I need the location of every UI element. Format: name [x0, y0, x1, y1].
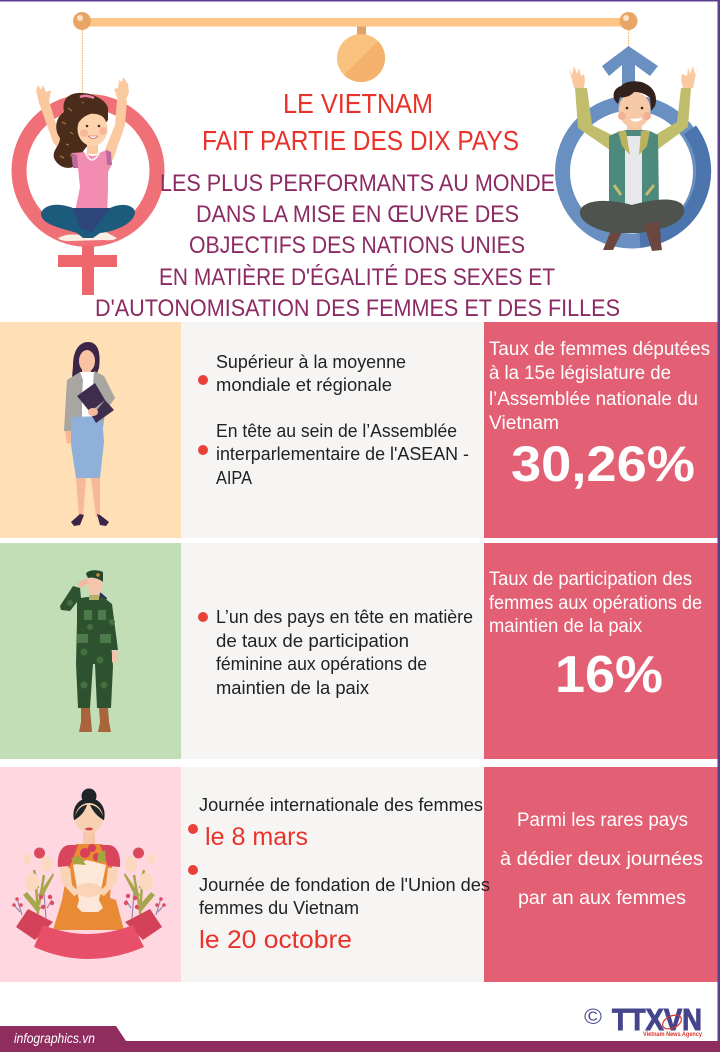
callout text: Parmi les rares pays	[517, 810, 688, 831]
icon: female soldier saluting	[60, 570, 118, 732]
title	[202, 88, 519, 156]
source label: infographics.vn	[14, 1030, 95, 1046]
bullet list	[198, 352, 469, 488]
bullet list: Supérieur à la moyenne	[216, 352, 406, 372]
icon: businesswoman	[64, 342, 115, 526]
icon: female symbol with seated woman	[19, 77, 157, 295]
stat: 16%: femmes aux opérations de	[489, 593, 702, 614]
subtitle: OBJECTIFS DES NATIONS UNIES	[189, 232, 525, 259]
bullet list: interparlementaire de l'ASEAN -	[216, 444, 469, 464]
stat: 30,26%	[489, 339, 710, 492]
panel: row 2 peacekeeping	[0, 543, 718, 759]
stat: 16%: 16%	[555, 646, 663, 704]
bullets and dates: le 20 octobre	[199, 926, 352, 954]
icon: woman with bouquet and ribbon	[12, 788, 166, 959]
panel: row 3 women's days	[0, 767, 718, 982]
bullets and dates: Journée de fondation de l'Union des	[199, 875, 490, 895]
bullets and dates: femmes du Vietnam	[199, 898, 359, 918]
bullet list: AIPA	[216, 468, 252, 488]
icon: balance scale beam	[73, 12, 638, 95]
callout text: à dédier deux journées	[500, 849, 703, 870]
stat: 30,26%: l’Assemblée nationale du	[489, 389, 698, 410]
bullets and dates: le 8 mars	[205, 823, 308, 851]
footer bar	[0, 1026, 720, 1052]
logo: TTXVN: Vietnam News Agency	[643, 1031, 702, 1038]
bullets and dates: Journée internationale des femmes	[199, 795, 483, 815]
bullet list: mondiale et régionale	[216, 375, 392, 395]
subtitle: DANS LA MISE EN ŒUVRE DES	[196, 201, 519, 228]
subtitle: EN MATIÈRE D'ÉGALITÉ DES SEXES ET	[159, 264, 555, 291]
bullet list: de taux de participation	[216, 631, 409, 651]
subtitle	[95, 170, 620, 322]
stat: 30,26%: Taux de femmes députées	[489, 339, 710, 360]
callout text	[500, 810, 703, 909]
bullet list: maintien de la paix	[216, 678, 369, 698]
logo: TTXVN	[584, 1002, 702, 1038]
title line 1: LE VIETNAM	[283, 88, 433, 119]
bullet list: féminine aux opérations de	[216, 654, 427, 674]
stat: 16%: Taux de participation des	[489, 569, 692, 590]
logo: TTXVN: ©	[584, 1004, 602, 1029]
bullet list	[198, 607, 473, 698]
stat: 16%	[489, 569, 702, 704]
logo: TTXVN: TTXVN	[612, 1002, 702, 1037]
stat: 16%: maintien de la paix	[489, 616, 642, 637]
callout text: par an aux femmes	[518, 888, 686, 909]
stat: 30,26%: 30,26%	[511, 436, 695, 492]
stat: 30,26%: Vietnam	[489, 413, 559, 434]
flowers	[12, 848, 166, 918]
subtitle: D'AUTONOMISATION DES FEMMES ET DES FILLES	[95, 295, 620, 322]
subtitle: LES PLUS PERFORMANTS AU MONDE	[160, 170, 555, 197]
icon: male symbol with seated man	[562, 46, 704, 251]
bullets and dates	[188, 795, 490, 954]
stat: 30,26%: à la 15e législature de	[489, 363, 671, 384]
panel: row 1 women deputies	[0, 322, 718, 538]
title line 2: FAIT PARTIE DES DIX PAYS	[202, 125, 519, 156]
bullet list: L’un des pays en tête en matière	[216, 607, 473, 627]
bullet list: En tête au sein de l’Assemblée	[216, 421, 457, 441]
